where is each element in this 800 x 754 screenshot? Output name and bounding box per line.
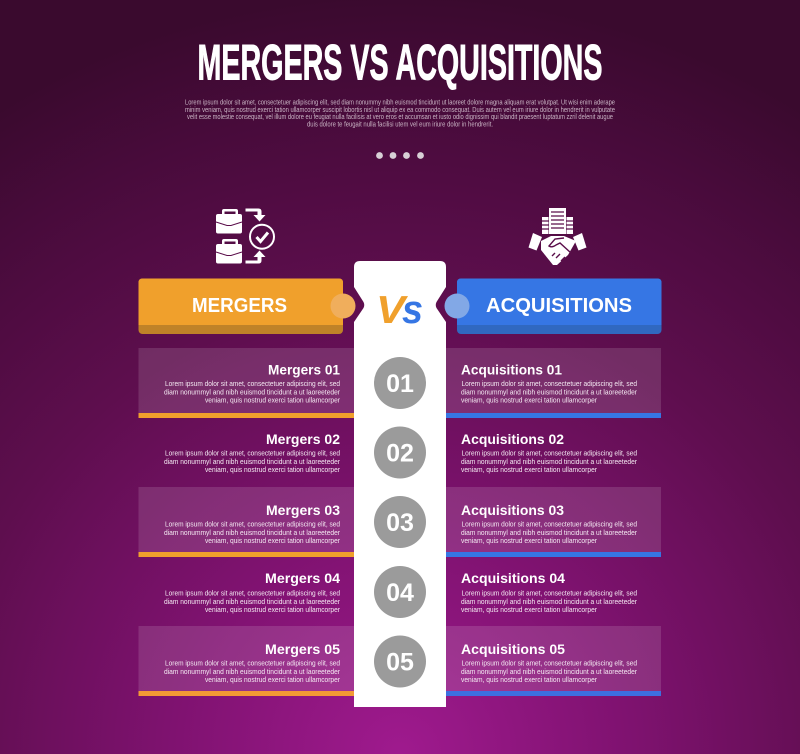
acquisitions 05: Acquisitions 05 <box>461 641 565 657</box>
intro text: duis dolore te feugait nulla facilisi utem vel eum iriure dolor in hendrerit. <box>307 121 493 128</box>
number circles: 01 <box>386 370 414 398</box>
mergers 02: diam nonummyl and nibh euismod tincidunt a ut laoreeteder <box>164 457 340 466</box>
acquisitions 03: veniam, quis nostrud exerci tation ullamcorper <box>461 536 597 545</box>
mergers 03: Lorem ipsum dolor sit amet, consectetuer adipiscing elit, sed <box>165 520 340 528</box>
mergers 02: Lorem ipsum dolor sit amet, consectetuer adipiscing elit, sed <box>165 448 340 458</box>
intro text <box>185 100 615 128</box>
mergers 04: diam nonummyl and nibh euismod tincidunt a ut laoreeteder <box>164 597 340 606</box>
panel: right row bands <box>445 348 661 696</box>
mergers 04: Mergers 04 <box>265 570 340 586</box>
intro text: Lorem ipsum dolor sit amet, consectetuer adipiscing elit, sed diam nonummy nibh euismod tincidunt ut laoreet dolore magna aliquam erat volutpat. Ut wisi enim aderape <box>185 100 615 107</box>
acquisitions 04 <box>461 570 637 614</box>
mergers 05: diam nonummyl and nibh euismod tincidunt a ut laoreeteder <box>164 667 340 676</box>
acquisitions 02 <box>461 431 637 474</box>
acquisitions 03: Acquisitions 03 <box>461 502 564 518</box>
acquisitions 02: diam nonummyl and nibh euismod tincidunt a ut laoreeteder <box>461 457 637 466</box>
acquisitions 01: diam nonummyl and nibh euismod tincidunt a ut laoreeteder <box>461 388 637 396</box>
mergers 01: veniam, quis nostrud exerci tation ullamcorper <box>205 396 340 404</box>
mergers 04 <box>164 570 340 614</box>
acquisitions 05: veniam, quis nostrud exerci tation ullamcorper <box>461 675 597 684</box>
acquisitions 04: diam nonummyl and nibh euismod tincidunt a ut laoreeteder <box>461 597 637 606</box>
mergers 02: Mergers 02 <box>266 431 340 447</box>
mergers 01: diam nonummyl and nibh euismod tincidunt a ut laoreeteder <box>164 388 340 396</box>
mergers 01 <box>164 362 340 404</box>
mergers 03: Mergers 03 <box>266 502 340 518</box>
mergers 02 <box>164 431 340 474</box>
mergers 05: Lorem ipsum dolor sit amet, consectetuer adipiscing elit, sed <box>165 658 340 668</box>
intro text: velit esse molestie consequat, vel illum dolore eu feugiat nulla facilisis at vero eros et accumsan et iusto odio dignissim qui blandit praesent luptatum zzril delenit augue <box>187 114 613 121</box>
mergers 05 <box>164 641 340 684</box>
mergers 02: veniam, quis nostrud exerci tation ullamcorper <box>205 465 340 474</box>
mergers 04: veniam, quis nostrud exerci tation ullamcorper <box>205 605 340 614</box>
mergers 04: Lorem ipsum dolor sit amet, consectetuer adipiscing elit, sed <box>165 588 340 598</box>
center white column <box>354 261 446 707</box>
acquisitions 04: Lorem ipsum dolor sit amet, consectetuer adipiscing elit, sed <box>462 588 637 598</box>
vs badge: s <box>402 288 423 332</box>
mergers 01: Mergers 01 <box>268 362 340 378</box>
acquisitions 03 <box>461 502 637 545</box>
acquisitions 01 <box>461 362 637 404</box>
acquisitions 04: Acquisitions 04 <box>461 570 565 586</box>
header: mergers <box>138 278 356 334</box>
intro text: minim veniam, quis nostrud exerci tation ullamcorper suscipit lobortis nisl ut aliquip ex ea commodo consequat. Duis autem vel eum iriure dolor in hendrerit in vulputate <box>185 107 615 114</box>
number circles: 04 <box>386 579 414 607</box>
acquisitions 02: veniam, quis nostrud exerci tation ullamcorper <box>461 465 597 474</box>
mergers 05: Mergers 05 <box>265 641 340 657</box>
pagination dots <box>376 152 424 159</box>
acquisitions 05: Lorem ipsum dolor sit amet, consectetuer adipiscing elit, sed <box>462 658 637 668</box>
mergers 03: diam nonummyl and nibh euismod tincidunt a ut laoreeteder <box>164 528 340 537</box>
acquisitions 03: diam nonummyl and nibh euismod tincidunt a ut laoreeteder <box>461 528 637 537</box>
acquisitions 01: Lorem ipsum dolor sit amet, consectetuer adipiscing elit, sed <box>462 379 637 388</box>
mergers 03: veniam, quis nostrud exerci tation ullamcorper <box>205 536 340 545</box>
mergers 03 <box>164 502 340 545</box>
acquisitions 01: veniam, quis nostrud exerci tation ullamcorper <box>461 396 597 404</box>
number circles <box>374 357 426 688</box>
vs badge: V <box>376 289 408 332</box>
acquisitions 03: Lorem ipsum dolor sit amet, consectetuer adipiscing elit, sed <box>462 520 637 528</box>
acquisitions 04: veniam, quis nostrud exerci tation ullamcorper <box>461 605 597 614</box>
number circles: 05 <box>386 648 414 676</box>
mergers 01: Lorem ipsum dolor sit amet, consectetuer adipiscing elit, sed <box>165 379 340 388</box>
number circles: 03 <box>386 509 414 537</box>
acquisitions 02: Acquisitions 02 <box>461 431 564 447</box>
header: acquisitions: ACQUISITIONS <box>486 295 632 317</box>
acquisitions 01: Acquisitions 01 <box>461 362 562 378</box>
mergers 05: veniam, quis nostrud exerci tation ullamcorper <box>205 675 340 684</box>
acquisitions 02: Lorem ipsum dolor sit amet, consectetuer adipiscing elit, sed <box>462 448 637 458</box>
icon: buildings and handshake <box>528 208 586 265</box>
acquisitions 05: diam nonummyl and nibh euismod tincidunt a ut laoreeteder <box>461 667 637 676</box>
header: acquisitions <box>444 278 662 334</box>
icon: briefcases with check <box>216 208 274 264</box>
acquisitions 05 <box>461 641 637 684</box>
vs badge <box>376 288 423 332</box>
header: mergers: MERGERS <box>192 295 287 317</box>
panel: left row bands <box>138 348 354 696</box>
number circles: 02 <box>386 440 414 468</box>
